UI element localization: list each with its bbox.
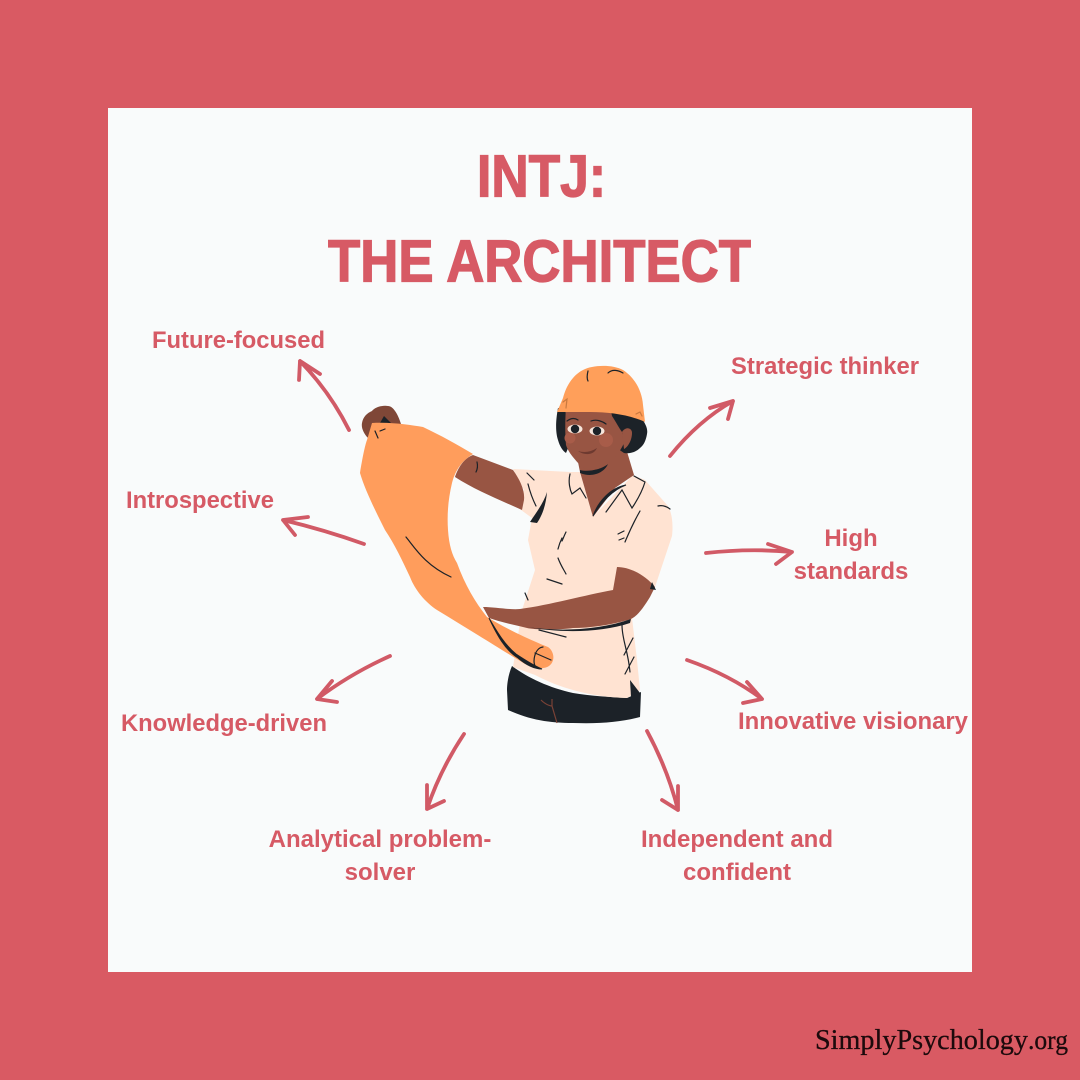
label: Strategic thinker: Strategic thinker [731, 353, 919, 380]
blueprint roll end and folds [375, 429, 551, 669]
arrow: Introspective [283, 517, 364, 544]
label: Knowledge-driven: Knowledge-driven [121, 710, 327, 737]
head [556, 366, 647, 470]
label: Future-focused: Future-focused [152, 327, 325, 354]
face [565, 406, 624, 470]
arrow: Knowledge-driven [317, 656, 390, 702]
label: Analytical problem-solver: solver [345, 859, 415, 886]
trousers [507, 666, 641, 723]
brows and mouth [567, 419, 606, 424]
label: Introspective: Introspective [126, 487, 274, 514]
forearm and hand [483, 567, 655, 630]
hair [556, 408, 647, 453]
panel: white card [108, 108, 972, 972]
arrow: Analytical problem-solver [427, 734, 464, 809]
cheeks [564, 432, 576, 444]
upper arm [455, 455, 524, 510]
title: INTJ: [477, 144, 606, 210]
neck shadow and collar lines [527, 464, 670, 542]
illustration: architect holding blueprint [360, 366, 673, 723]
arrow: Innovative visionary [687, 660, 762, 703]
hard hat [557, 366, 645, 422]
shirt [513, 469, 673, 698]
blueprint paper [360, 423, 553, 668]
arrow: Future-focused [299, 361, 349, 430]
ear [622, 428, 632, 449]
source credit: .org [1028, 1025, 1068, 1055]
arrow: High standards [706, 544, 792, 564]
neck [578, 445, 634, 517]
source credit: SimplyPsychology [815, 1024, 1028, 1056]
label: Independent and confident: Independent and [641, 826, 833, 853]
label: Innovative visionary: Innovative visionary [738, 708, 969, 735]
arrow: Strategic thinker [670, 401, 733, 456]
left hand [362, 406, 401, 438]
label: Analytical problem-solver: Analytical problem- [269, 826, 491, 853]
label: High standards: High [824, 525, 878, 552]
label: Independent and confident: confident [683, 859, 791, 886]
label: High standards: standards [794, 558, 908, 585]
title: THE ARCHITECT [328, 228, 751, 294]
title [328, 144, 751, 294]
arrow: Independent and confident [647, 731, 678, 810]
eyes [568, 424, 582, 434]
